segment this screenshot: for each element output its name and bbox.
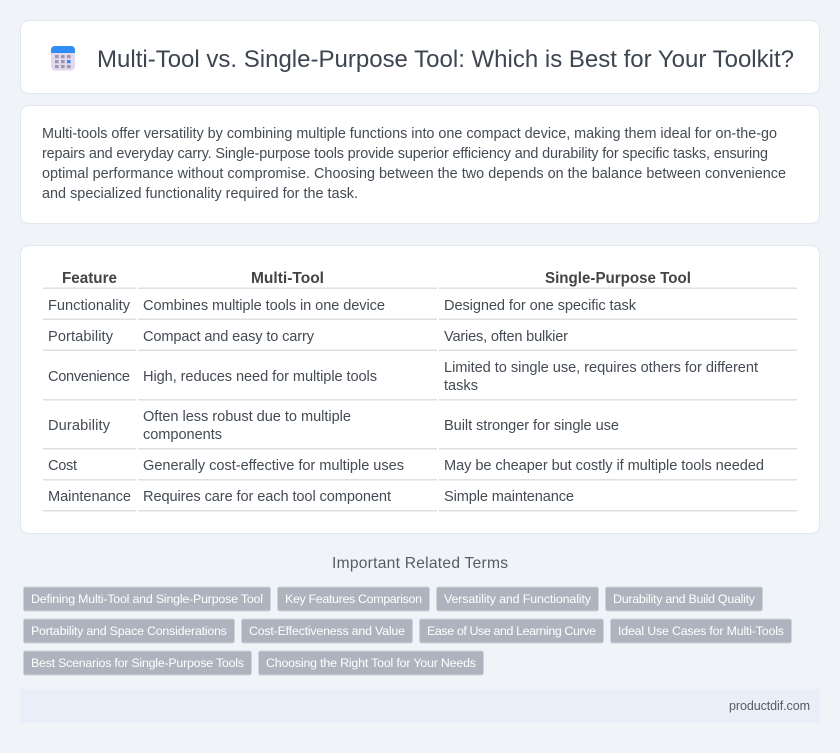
row: cost: Generally cost-effective for multiple uses bbox=[143, 458, 404, 474]
tag: Cost-Effectiveness and Value bbox=[249, 624, 405, 638]
table header row bbox=[62, 270, 691, 287]
row: durability: Often less robust due to multiple bbox=[143, 409, 351, 425]
row: cost bbox=[48, 458, 764, 474]
row: cost: May be cheaper but costly if multiple tools needed bbox=[444, 458, 764, 474]
tag: Defining Multi-Tool and Single-Purpose Tool bbox=[31, 592, 263, 606]
row: durability: components bbox=[143, 427, 222, 443]
intro paragraph: and specialized functionality required for the task. bbox=[42, 186, 358, 202]
row: functionality: Functionality bbox=[48, 298, 131, 314]
intro text panel bbox=[20, 106, 820, 224]
tag: Best Scenarios for Single-Purpose Tools bbox=[31, 656, 244, 670]
row: portability: Varies, often bulkier bbox=[444, 329, 568, 345]
row: maintenance: Requires care for each tool component bbox=[143, 489, 391, 505]
tag: Durability and Build Quality bbox=[613, 592, 756, 606]
row: maintenance: Simple maintenance bbox=[444, 489, 574, 505]
tag bbox=[24, 619, 234, 643]
table header row: Single-Purpose Tool bbox=[545, 270, 691, 287]
row: portability: Portability bbox=[48, 329, 114, 345]
row: convenience: Limited to single use, requires others for different bbox=[444, 360, 758, 376]
row: convenience: High, reduces need for multiple tools bbox=[143, 369, 377, 385]
tag bbox=[242, 619, 412, 643]
row: functionality: Combines multiple tools in one device bbox=[143, 298, 385, 314]
tag: Ideal Use Cases for Multi-Tools bbox=[618, 624, 784, 638]
tag bbox=[420, 619, 604, 643]
row: functionality: Designed for one specific task bbox=[444, 298, 637, 314]
related terms tags bbox=[24, 587, 792, 675]
tag bbox=[24, 587, 270, 611]
intro paragraph: Multi-tools offer versatility by combining multiple functions into one compact device, making them ideal for on-the-go bbox=[42, 126, 777, 142]
intro paragraph bbox=[42, 126, 786, 202]
icon: calendar grid bbox=[51, 46, 75, 70]
comparison table panel bbox=[20, 246, 820, 534]
tag bbox=[24, 651, 252, 675]
related terms heading: Important Related Terms bbox=[332, 555, 508, 572]
tag bbox=[258, 651, 484, 675]
title: Multi-Tool vs. Single-Purpose Tool: Which is Best for Your Toolkit? bbox=[97, 46, 794, 73]
intro paragraph: optimal performance without compromise. Choosing between the two depends on the balance between convenience bbox=[42, 166, 786, 182]
tag: Ease of Use and Learning Curve bbox=[427, 624, 596, 638]
tag bbox=[606, 587, 762, 611]
row: portability: Compact and easy to carry bbox=[143, 329, 315, 345]
row: cost: Cost bbox=[48, 458, 77, 474]
row: convenience: Convenience bbox=[48, 369, 130, 385]
intro paragraph: repairs and everyday carry. Single-purpose tools provide superior efficiency and durability for specific tasks, ensuring bbox=[42, 146, 768, 162]
tag: Portability and Space Considerations bbox=[31, 624, 227, 638]
tag bbox=[278, 587, 430, 611]
row: convenience bbox=[48, 360, 758, 394]
row: maintenance: Maintenance bbox=[48, 489, 131, 505]
tag bbox=[436, 587, 598, 611]
tag: Choosing the Right Tool for Your Needs bbox=[266, 656, 476, 670]
row: portability bbox=[48, 329, 568, 345]
table header row: Feature bbox=[62, 270, 117, 287]
tag: Key Features Comparison bbox=[285, 592, 422, 606]
table header row: Multi-Tool bbox=[251, 270, 324, 287]
footer source text: productdif.com bbox=[729, 699, 810, 713]
row: durability bbox=[48, 409, 619, 443]
tag: Versatility and Functionality bbox=[444, 592, 592, 606]
header panel bbox=[20, 20, 820, 94]
row: durability: Built stronger for single use bbox=[444, 418, 619, 434]
row: maintenance bbox=[48, 489, 574, 505]
footer bar bbox=[20, 689, 820, 723]
tag bbox=[610, 619, 792, 643]
row: durability: Durability bbox=[48, 418, 111, 434]
row: convenience: tasks bbox=[444, 378, 478, 394]
row: functionality bbox=[48, 298, 637, 314]
